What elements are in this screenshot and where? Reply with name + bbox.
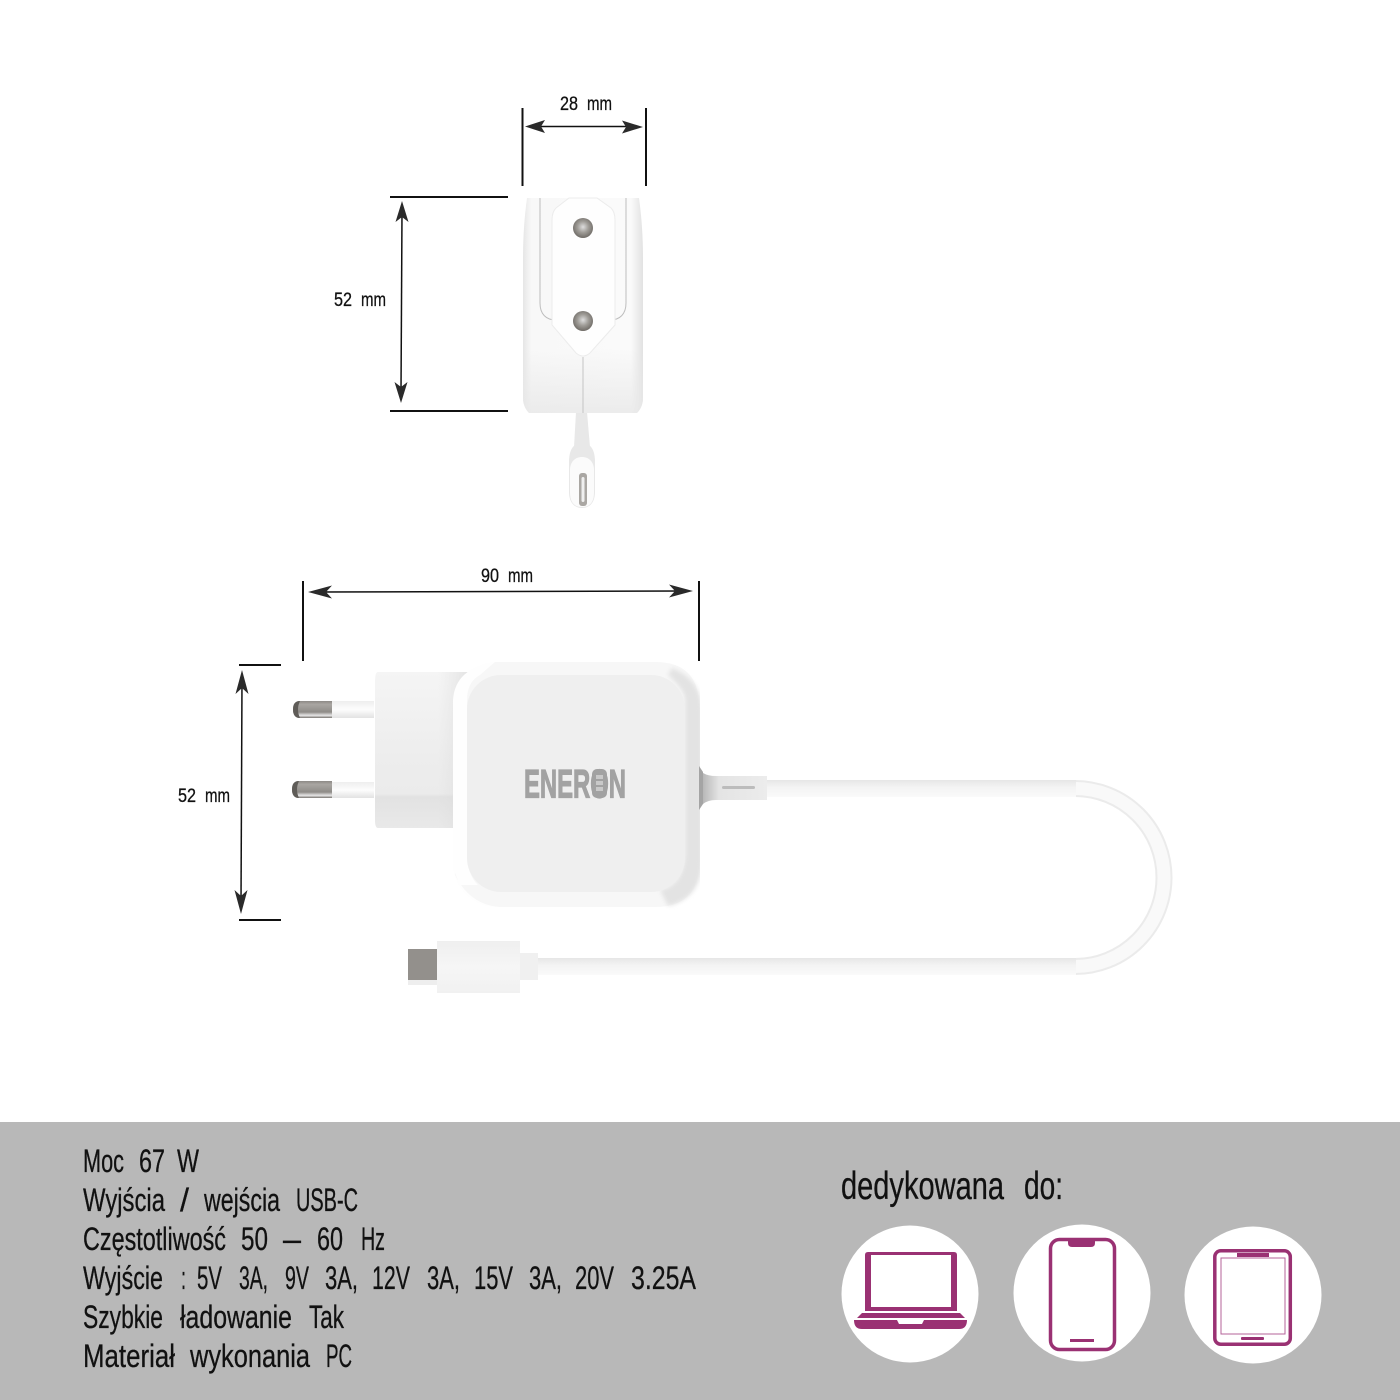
charging cable (530, 780, 1164, 975)
dimension: 28 mm width: mm (587, 94, 612, 115)
dimension: 28 mm width (522, 94, 646, 186)
logo ENERON (524, 762, 626, 806)
cable strain relief (699, 766, 767, 810)
icon: smartphone (1014, 1224, 1150, 1362)
dimension: 52 mm height top view (334, 197, 508, 411)
specifications text: 3.25A (631, 1260, 697, 1296)
specifications text: : (181, 1260, 186, 1296)
pin upper (573, 218, 593, 238)
dimension: 52 mm height side view: 52 (178, 786, 196, 807)
specifications text: ładowanie (180, 1299, 292, 1335)
specifications text: wykonania (189, 1338, 310, 1374)
specifications text: – (283, 1221, 301, 1257)
dimension: 90 mm length (303, 566, 699, 661)
icon: tablet (1184, 1226, 1322, 1364)
specifications text: Hz (361, 1221, 385, 1257)
specifications text: 60 (317, 1221, 343, 1257)
charger body (523, 198, 643, 413)
specifications text: 67 (139, 1143, 165, 1179)
specifications text: Materiał (83, 1338, 175, 1374)
specifications text: 12V (372, 1260, 410, 1296)
dimension: 52 mm height top view: mm (361, 290, 386, 311)
specifications text (83, 1143, 697, 1374)
charger outer shell (453, 662, 702, 907)
specifications text: Wyjścia (83, 1182, 165, 1218)
specifications text: W (177, 1143, 200, 1179)
logo ENERON: ENERON (524, 762, 626, 806)
specifications text: 3A, (427, 1260, 460, 1296)
specifications text: Szybkie (83, 1299, 163, 1335)
heading: dedicated for: do: (1024, 1165, 1063, 1208)
dimension: 90 mm length: mm (508, 566, 533, 587)
specifications text: wejścia (203, 1182, 280, 1218)
dimension: 52 mm height side view (178, 665, 281, 920)
specifications text: 9V (285, 1260, 309, 1296)
icon: laptop (842, 1226, 978, 1362)
specifications text: Wyjście (83, 1260, 163, 1296)
specifications text: 50 (241, 1221, 268, 1257)
plug block (375, 672, 480, 828)
side view: charger with cable (292, 662, 1164, 993)
cable stub (574, 412, 590, 447)
USB-C connector front (569, 443, 595, 508)
dimension: 28 mm width: 28 (560, 94, 578, 115)
top view: charger with plug and cable (523, 198, 643, 508)
heading: dedicated for: dedykowana (841, 1165, 1004, 1208)
USB-C plug (408, 941, 538, 993)
upper prong (293, 701, 374, 718)
specifications text: USB-C (296, 1182, 358, 1218)
specifications text: 15V (474, 1260, 513, 1296)
specifications text: 5V (197, 1260, 222, 1296)
specifications text: Moc (83, 1143, 124, 1179)
specifications text: PC (326, 1338, 352, 1374)
panel: specifications band (0, 1122, 1400, 1400)
plug face (552, 198, 615, 356)
specifications text: 3A, (529, 1260, 562, 1296)
dimension: 52 mm height side view: mm (205, 786, 230, 807)
specifications text: 3A, (239, 1260, 268, 1296)
dimension: 90 mm length: 90 (481, 566, 499, 587)
specifications text: 20V (575, 1260, 614, 1296)
specifications text: 3A, (325, 1260, 358, 1296)
lower prong (292, 781, 374, 798)
pin lower (573, 311, 593, 331)
specifications text: Częstotliwość (83, 1221, 226, 1257)
specifications text: / (180, 1182, 189, 1218)
charger front face (467, 675, 685, 892)
dimension: 52 mm height top view: 52 (334, 290, 352, 311)
specifications text: Tak (309, 1299, 345, 1335)
